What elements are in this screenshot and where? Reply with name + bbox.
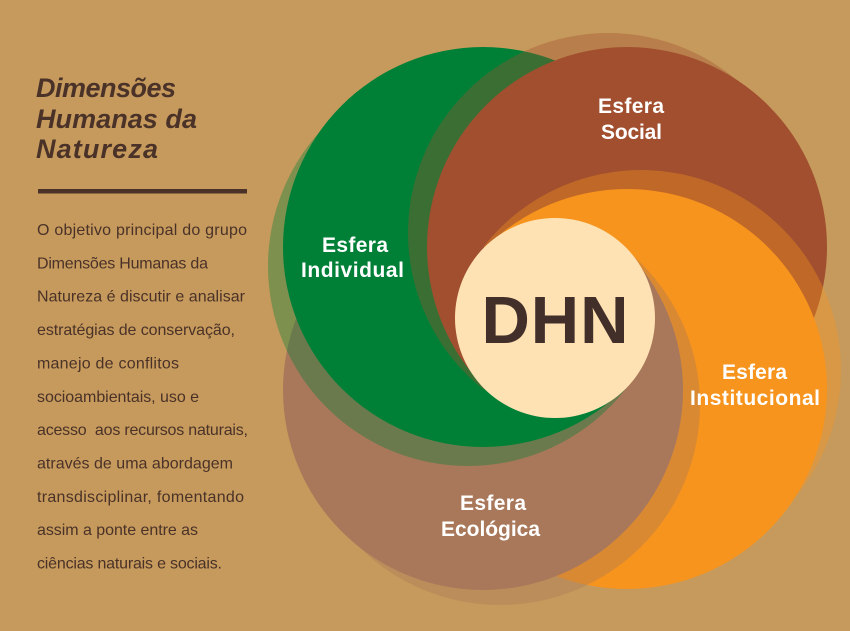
description text: Natureza é discutir e analisar: [37, 289, 246, 306]
description text: transdisciplinar, fomentando: [37, 489, 244, 506]
description text: acesso aos recursos naturais,: [37, 422, 248, 439]
description text: através de uma abordagem: [37, 456, 233, 472]
label: Esfera Institucional: Esfera: [722, 361, 787, 384]
title: [36, 73, 197, 164]
label: Esfera Social: Esfera: [598, 95, 664, 118]
label: Esfera Institucional: Institucional: [690, 387, 820, 410]
label: Esfera Ecológica: Esfera: [460, 492, 526, 515]
description text: assim a ponte entre as: [37, 522, 198, 539]
title: Humanas da: [36, 104, 197, 134]
label: Esfera Ecológica: [441, 492, 540, 541]
label: Esfera Individual: Esfera: [322, 234, 388, 257]
label: Esfera Institucional: [690, 361, 820, 410]
swirl diagram: [268, 33, 841, 605]
center circle: DHN: DHN: [482, 283, 628, 358]
swirl overlap: left sector: [427, 246, 484, 438]
description text: estratégias de conservação,: [37, 322, 235, 339]
sphere: institucional: [427, 170, 841, 589]
description text: [37, 222, 248, 572]
swirl overlap: bottom sector: [434, 388, 692, 585]
description text: manejo de conflitos: [37, 355, 179, 372]
label: Esfera Social: [598, 95, 664, 144]
center circle: DHN: [455, 218, 655, 418]
label: Esfera Ecológica: Ecológica: [441, 518, 540, 541]
sphere: social: [408, 33, 827, 447]
sphere: ecológica: [283, 190, 700, 605]
label: Esfera Social: Social: [601, 121, 662, 144]
label: Esfera Individual: [301, 234, 404, 282]
title: Dimensões: [36, 73, 176, 103]
description text: ciências naturais e sociais.: [37, 556, 222, 572]
title: Natureza: [36, 134, 158, 164]
description text: Dimensões Humanas da: [37, 255, 208, 272]
description text: socioambientais, uso e: [37, 389, 199, 406]
description text: O objetivo principal do grupo: [37, 222, 247, 239]
sphere: individual: [268, 47, 683, 466]
label: Esfera Individual: Individual: [301, 259, 404, 282]
swirl overlap: right sector: [626, 256, 700, 456]
